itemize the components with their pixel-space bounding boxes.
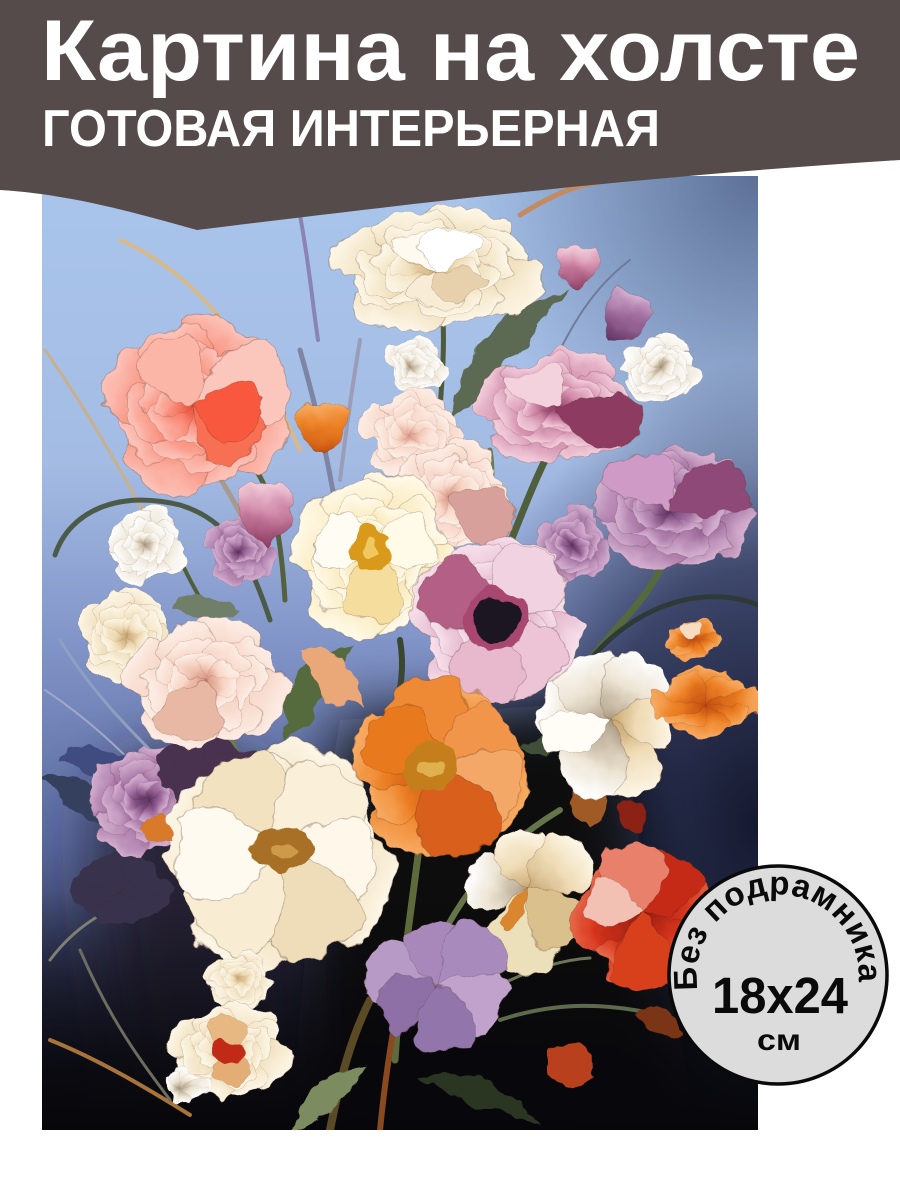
flower: dark purple lower left [156,738,257,804]
flower centre [253,828,313,872]
bud: mauve left [239,483,295,545]
flower: pink behind center [398,437,518,548]
badge: size [667,864,889,1086]
subtitle: ГОТОВАЯ ИНТЕРЬЕРНАЯ [42,100,660,158]
flower: mauve small right [536,504,610,584]
title: Картина на холсте [41,3,860,99]
header banner [0,0,900,230]
flower: pink daisy with dark centre [408,536,588,704]
flower: white lily [534,650,672,801]
flower: cream lily lower [462,822,602,980]
flower: white small bottom [164,1064,207,1107]
painted flowers [45,185,784,1130]
flower: white right [619,332,703,402]
bud: orange left [138,816,171,842]
flower centre [350,528,392,570]
flower: small white [384,334,450,391]
flower: dark mauve lower left [71,727,221,877]
bud: orange [300,402,346,454]
flower: pink peony right [472,344,644,464]
badge size number: 18x24 [712,967,849,1024]
flower: top cream peony [328,204,546,333]
flower: peach carnation [120,616,294,751]
dark foliage mass [290,700,700,1130]
grass and stems [45,182,758,1130]
flower: orange poppy [352,674,532,858]
flower: small white lower [194,941,288,1021]
flower: small mauve left [204,515,278,587]
flower: dusky lower [69,853,174,929]
flower: cream with red centre [146,985,312,1118]
flower centre [212,1040,244,1065]
panel: flower painting [42,176,784,1130]
bud: orange white right [666,619,726,661]
leaves [45,290,680,1130]
flower: white left [78,586,170,684]
flower: orange right [649,669,765,737]
painting background [42,176,758,1130]
flower: large cream [161,736,400,973]
bud: mauve [604,284,654,341]
flower: coral pink peony [100,313,292,498]
flower: red poppy [570,839,715,992]
petals: dark red accents [617,800,647,830]
flower centre [403,741,457,795]
badge arc text: Без подрамника [674,876,876,989]
flower: white left small [108,504,188,588]
flower: pale yellow large [288,472,456,642]
bud: pink top [557,244,599,292]
flower: peach center [357,387,464,477]
flower: purple iris [359,911,519,1054]
flower: mauve large right [592,444,758,570]
flower centre [472,597,518,643]
badge unit: см [757,1024,801,1057]
flowers behind [69,497,623,929]
